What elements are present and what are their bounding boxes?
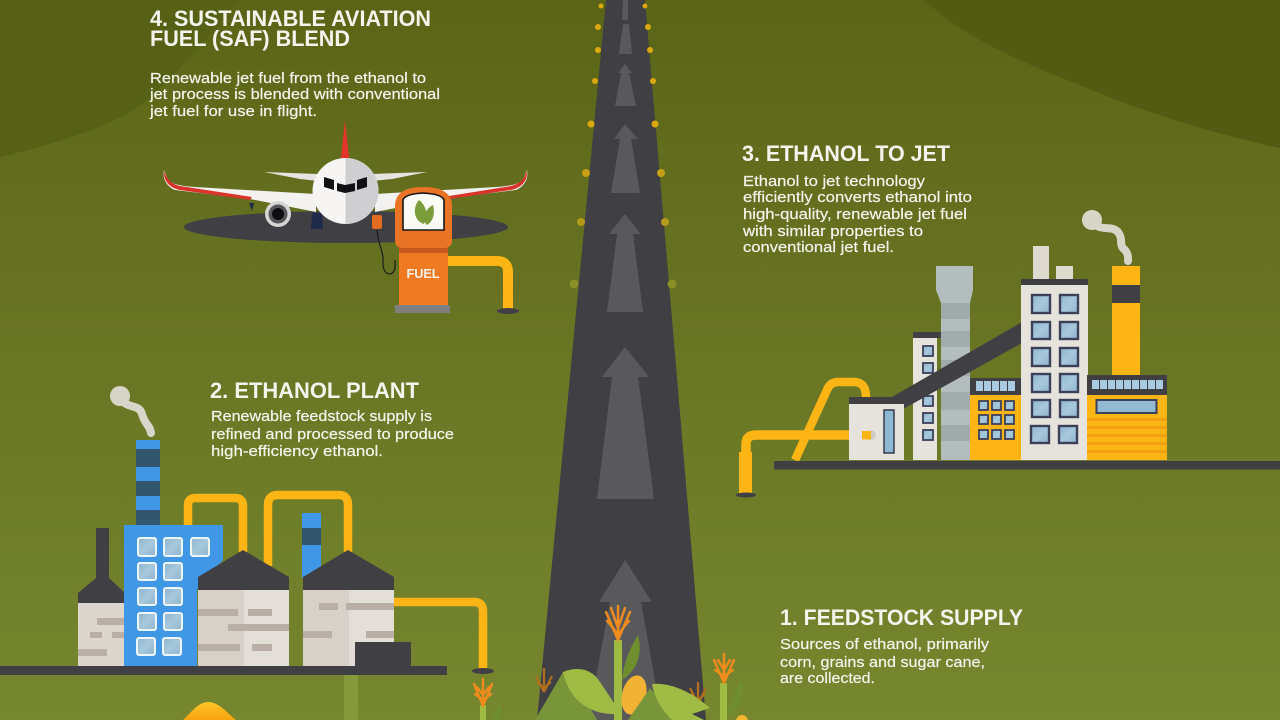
- heading: step 3: 3. ETHANOL TO JET: [742, 141, 950, 166]
- pump label: FUEL: [406, 267, 440, 281]
- ethanol plant: [0, 386, 494, 675]
- body: step 3: [742, 173, 972, 256]
- body: step 4: jet process is blended with conventional: [149, 86, 440, 103]
- small chimney: [302, 513, 321, 578]
- silo 2: [303, 550, 394, 666]
- left wing: [164, 170, 316, 212]
- heading: step 2: 2. ETHANOL PLANT: [210, 378, 419, 403]
- body: step 1: corn, grains and sugar cane,: [780, 654, 985, 671]
- rooftop stacks: [1033, 246, 1073, 279]
- body: step 3: high-quality, renewable jet fuel: [743, 206, 967, 223]
- ground platform: [774, 461, 1280, 470]
- body: step 2: high-efficiency ethanol.: [211, 443, 383, 460]
- step 4: SAF blend text: [149, 6, 440, 120]
- smoke: [1082, 210, 1128, 261]
- body: step 1: are collected.: [780, 670, 875, 687]
- step 3: ethanol to jet text: [742, 141, 972, 256]
- engine: [265, 201, 291, 227]
- small corn dome: [736, 715, 748, 720]
- landing gear: [249, 203, 323, 229]
- body: step 1: [780, 636, 990, 687]
- inlet pipe: [795, 382, 866, 460]
- green stem: [344, 675, 358, 720]
- body: step 1: Sources of ethanol, primarily: [780, 636, 990, 653]
- grey left building: [78, 603, 125, 666]
- dark leaves: [535, 672, 678, 720]
- corn crops: [474, 606, 748, 720]
- cockpit windows: [324, 177, 367, 193]
- narrow building: [913, 332, 941, 460]
- step 1: feedstock text: [780, 605, 1023, 687]
- body: step 3: with similar properties to: [742, 223, 923, 240]
- ground shadow: [184, 211, 508, 243]
- connecting pipes: [188, 498, 243, 552]
- runway lights: [570, 4, 676, 288]
- fuel nozzle: [372, 215, 382, 229]
- right wing: [375, 170, 527, 212]
- heading: step 1: 1. FEEDSTOCK SUPPLY: [780, 605, 1023, 630]
- feed pipe: [746, 435, 875, 460]
- main stalk: [614, 640, 622, 720]
- left stalk: [480, 705, 486, 720]
- fuselage: [312, 158, 378, 224]
- conveyor: [892, 322, 1022, 408]
- pump head: [395, 187, 452, 248]
- pipe base: [739, 452, 752, 495]
- yellow mid building: [970, 378, 1021, 460]
- small front building: [849, 397, 904, 460]
- fuel pump: [372, 187, 519, 314]
- grey tower: [936, 266, 973, 460]
- body: step 3: conventional jet fuel.: [743, 239, 894, 256]
- dark box: [355, 642, 411, 666]
- corn cob: [618, 673, 650, 717]
- body: step 4: jet fuel for use in flight.: [149, 103, 317, 120]
- pump pipe: [448, 261, 508, 311]
- fuel hose: [377, 230, 395, 274]
- pump body: [395, 247, 450, 313]
- tall building: [1021, 279, 1088, 460]
- body: step 2: refined and processed to produce: [211, 426, 454, 443]
- pipe floor shadow: [472, 668, 494, 674]
- second connecting pipe: [268, 495, 348, 566]
- tassels: [474, 606, 734, 706]
- body: step 4: [149, 70, 440, 120]
- faded tassels: [536, 668, 706, 704]
- ground platform: [0, 666, 447, 675]
- body: step 2: Renewable feedstock supply is: [211, 408, 432, 425]
- leaf icon: [415, 200, 434, 225]
- silo 1: [198, 550, 289, 666]
- body: step 3: efficiently converts ethanol into: [743, 189, 972, 206]
- ethanol to jet plant: [736, 210, 1280, 498]
- airplane: [164, 120, 527, 243]
- smoke: [110, 386, 151, 433]
- yellow chimney: [1112, 266, 1140, 375]
- output pipe: [394, 602, 483, 671]
- dark chimney and roof: [78, 528, 125, 603]
- pipe floor shadow: [497, 308, 519, 314]
- blue chimney: [136, 440, 160, 525]
- body: step 4: Renewable jet fuel from the ethanol to: [150, 70, 426, 87]
- runway arrows: [588, 0, 662, 720]
- heading: step 4: [150, 6, 431, 51]
- horizontal stabilizers: [264, 172, 427, 181]
- runway: [537, 0, 706, 720]
- body: step 2: [211, 408, 454, 460]
- heading: step 4: FUEL (SAF) BLEND: [150, 26, 350, 51]
- runway surface: [537, 0, 706, 720]
- right stalk: [720, 683, 727, 720]
- step 2: ethanol plant text: [210, 378, 454, 460]
- pump screen: [403, 193, 444, 230]
- body: step 3: Ethanol to jet technology: [743, 173, 926, 190]
- heading: step 4: 4. SUSTAINABLE AVIATION: [150, 6, 431, 31]
- tail fin: [341, 120, 349, 158]
- bright leaves: [563, 669, 710, 720]
- thin leaves: [492, 635, 743, 720]
- pipe floor shadow: [736, 492, 756, 498]
- yellow dome: [183, 702, 236, 720]
- yellow right building: [1087, 375, 1167, 460]
- blue building: [124, 525, 223, 666]
